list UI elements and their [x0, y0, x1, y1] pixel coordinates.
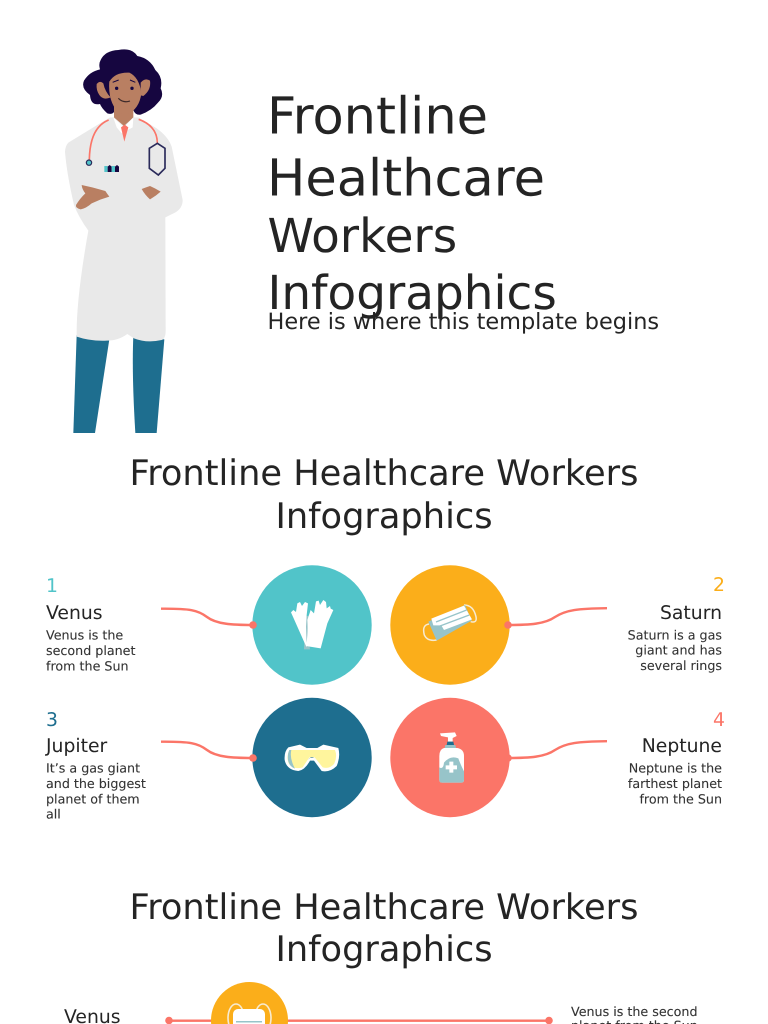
item 2: Saturn text: 2	[713, 575, 725, 596]
doctor collar and tie	[113, 117, 133, 142]
connector lines	[161, 608, 607, 758]
section heading	[130, 453, 638, 537]
main title: Infographics	[268, 266, 557, 321]
item 3: Jupiter text: 3	[46, 710, 58, 731]
stethoscope	[86, 119, 165, 175]
item 3: Jupiter text: and the biggest	[46, 776, 146, 791]
item 1: Venus text: from the Sun	[46, 658, 129, 674]
main title: Healthcare	[267, 150, 545, 208]
subtitle: Here is where this template begins	[268, 309, 659, 335]
icon: face mask circle	[390, 565, 512, 685]
item 2: Saturn text: giant and has	[635, 642, 722, 658]
item 1: Venus text: second planet	[46, 643, 135, 658]
item 2: Saturn text: Saturn is a gas	[628, 628, 722, 642]
illustration: doctor	[65, 49, 183, 433]
icon: gloves circle	[249, 565, 372, 685]
item 3: Jupiter text: Jupiter	[45, 736, 108, 757]
item 1: Venus text: 1	[46, 576, 58, 597]
timeline row: Venus: Venus is the second	[571, 1004, 698, 1019]
timeline row: Venus	[64, 982, 698, 1024]
icon: goggles circle	[249, 698, 372, 817]
item 3: Jupiter text: all	[46, 806, 61, 822]
item 3: Jupiter text	[45, 710, 146, 822]
main title: Frontline	[267, 88, 488, 146]
item 3: Jupiter text: It’s a gas giant	[46, 760, 140, 776]
section heading: Infographics	[275, 496, 493, 537]
second section heading: Infographics	[275, 929, 493, 970]
second section heading	[130, 887, 638, 970]
item 2: Saturn text: several rings	[640, 658, 722, 673]
item 1: Venus text	[46, 576, 135, 674]
icon: sanitizer bottle circle	[390, 698, 512, 817]
item 2: Saturn text: Saturn	[660, 603, 722, 624]
item 2: Saturn text	[628, 575, 725, 673]
doctor hair	[83, 49, 162, 115]
main title: Workers	[268, 209, 457, 264]
item 4: Neptune text: farthest planet	[628, 776, 722, 791]
item 4: Neptune text	[628, 710, 725, 806]
icon: bottom mask	[228, 1004, 271, 1024]
item 1: Venus text: Venus	[46, 603, 103, 624]
doctor coat	[65, 117, 183, 341]
item 4: Neptune text: Neptune	[642, 736, 722, 757]
crossed hands	[76, 185, 161, 209]
item 4: Neptune text: 4	[713, 710, 725, 731]
item 3: Jupiter text: planet of them	[46, 792, 140, 806]
item 4: Neptune text: Neptune is the	[629, 760, 722, 776]
section heading: Frontline Healthcare Workers	[130, 453, 638, 494]
doctor trousers	[73, 335, 164, 433]
coat pocket pens	[104, 165, 119, 172]
doctor face	[97, 73, 150, 126]
item 4: Neptune text: from the Sun	[639, 792, 722, 806]
second section heading: Frontline Healthcare Workers	[130, 887, 638, 928]
item 1: Venus text: Venus is the	[46, 628, 123, 642]
main title	[267, 88, 557, 321]
